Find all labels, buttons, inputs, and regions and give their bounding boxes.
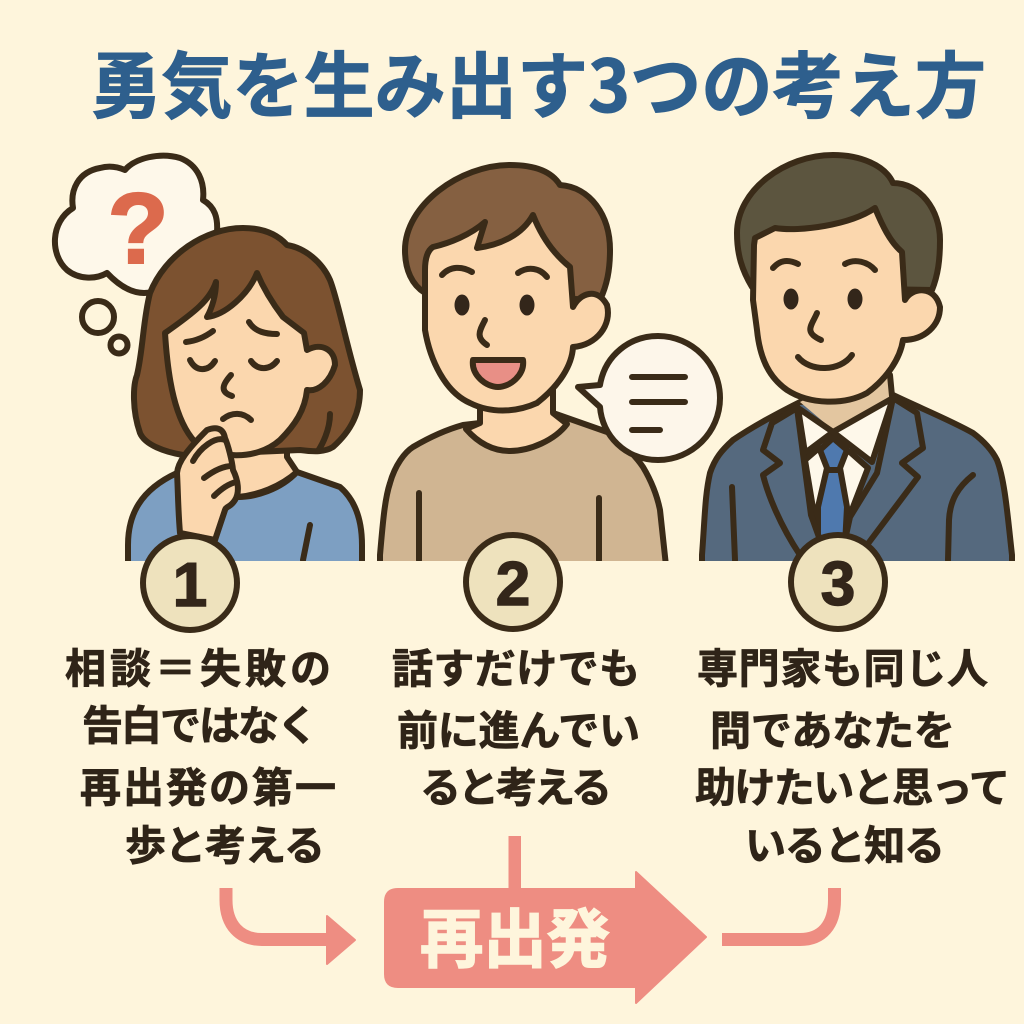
text block: step 1: 告白ではなく <box>82 692 318 752</box>
woman figure <box>128 228 362 575</box>
arrow: connector from step 2 <box>508 836 521 892</box>
text block: step 1: 再出発の第一 <box>80 754 336 814</box>
arrow: connector from step 3 <box>722 888 834 940</box>
number badge 1: 1 <box>173 551 207 620</box>
arrow: restart main arrow <box>385 872 706 1003</box>
icon: speech bubble <box>578 336 720 460</box>
text block: step 2: 話すだけでも <box>392 635 640 695</box>
text block: step 2: ると考える <box>420 754 612 814</box>
arrow: connector from step 1 <box>226 888 355 964</box>
text block: step 1 <box>65 635 336 872</box>
panel: person 2 talking man <box>380 165 720 575</box>
panel: person 3 suited expert <box>702 155 1012 575</box>
number badge 2: 2 <box>496 550 530 619</box>
number badge 3 <box>791 535 885 629</box>
panel: person 1 worried woman <box>55 156 362 575</box>
text block: step 3: 助けたいと思って <box>695 754 1010 814</box>
text block: step 1: 歩と考える <box>125 812 325 872</box>
text block: step 3: 問であなたを <box>710 697 955 757</box>
icon: thought bubble with question mark: ? <box>107 173 169 285</box>
expert figure <box>702 155 1012 575</box>
text block: step 1: 相談＝失敗の <box>65 635 331 695</box>
icon: thought bubble with question mark <box>55 156 217 354</box>
man figure <box>380 165 667 575</box>
text block: step 3: 専門家も同じ人 <box>697 635 988 695</box>
text block: step 3 <box>695 635 1010 872</box>
number badge 2 <box>466 535 560 629</box>
text block: step 2 <box>392 635 640 814</box>
number badge 3: 3 <box>821 550 855 619</box>
number badge 1 <box>143 536 237 630</box>
text block: step 3: いると知る <box>745 812 945 872</box>
title: 勇気を生み出す3つの考え方 <box>90 28 986 133</box>
arrow: restart main arrow: 再出発 <box>420 889 610 981</box>
text block: step 2: 前に進んでい <box>397 697 640 757</box>
